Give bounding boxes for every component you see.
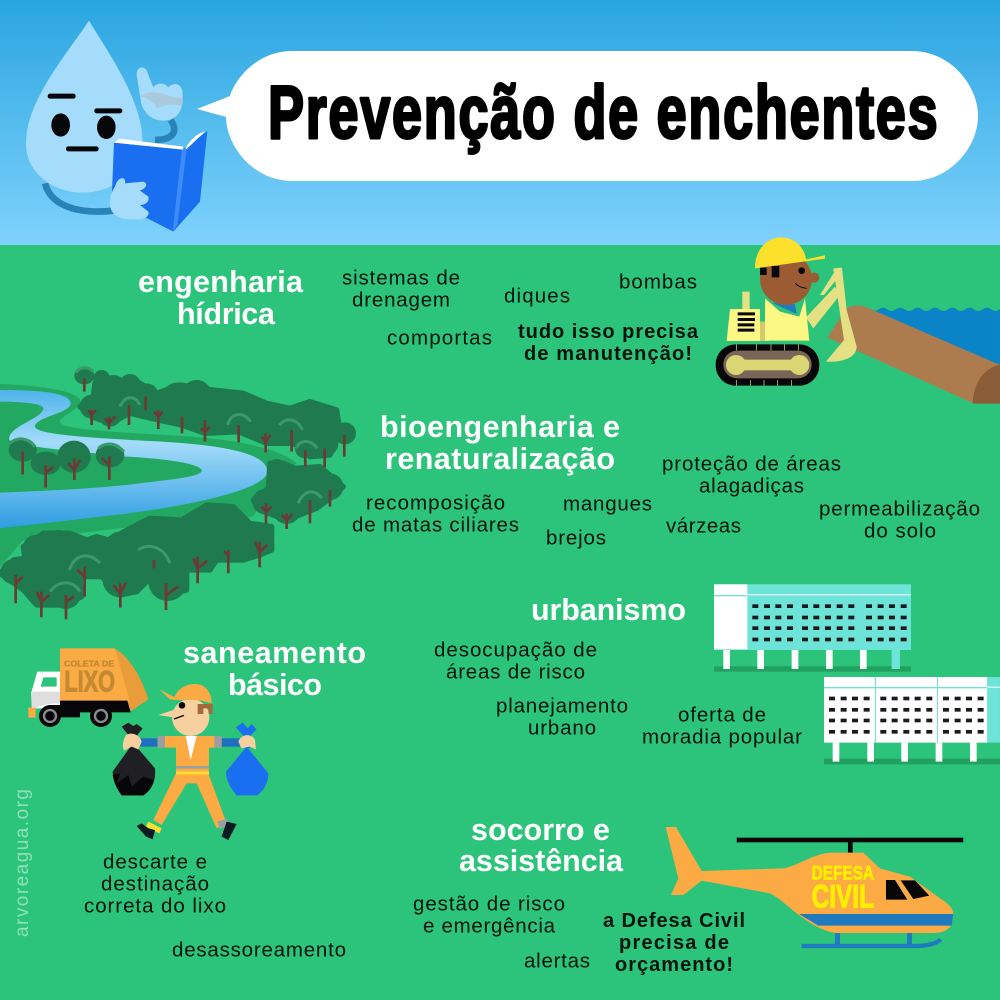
text block: recomposição de matas ciliares: de matas ciliares [352,514,519,536]
text block: descarte e destinação: destinação [101,872,209,896]
callout: Defesa Civil: precisa de [619,932,729,954]
text block: proteção de áreas alagadiças: alagadiças [699,474,804,498]
heading: bioengenharia e renaturalização: bioengenharia e [380,410,620,444]
tree crowns [1,368,356,609]
text block: descarte e destinação [84,850,226,918]
text block: gestão de risco: e emergência [423,914,556,938]
text: comportas: comportas [387,326,492,350]
river [0,390,267,528]
text block: proteção de áreas alagadiças [662,452,841,498]
text block: descarte e destinação: descarte e [103,850,207,874]
green ground background [0,245,1000,1000]
text block: sistemas de drenagem: sistemas de [342,266,460,290]
canopy highlights [10,368,322,592]
heading: saneamento básico [183,636,366,702]
tree trunks [16,378,344,619]
illustration: Defesa Civil helicopter: CIVIL [812,878,874,914]
text: mangues: mangues [563,492,652,516]
heading: bioengenharia e renaturalização: renaturalização [385,442,615,476]
text block: recomposição de matas ciliares: recomposição [366,492,505,514]
text block: proteção de áreas alagadiças: proteção de áreas [662,452,841,476]
illustration: garbage truck [28,648,148,727]
text block: recomposição de matas ciliares [352,492,519,536]
text block: oferta de moradia popular: oferta de [678,704,766,726]
text block: permeabilização do solo [819,498,980,542]
text block: gestão de risco: gestão de risco [413,892,565,916]
text block: oferta de moradia popular [642,704,802,748]
illustration: apartment block 1 [714,584,911,672]
text block: descarte e destinação: correta do lixo [84,894,226,918]
callout: Defesa Civil: orçamento! [615,954,733,976]
tree canopies [0,383,343,605]
callout: manutenção: de manutenção! [524,343,692,365]
illustration: Defesa Civil helicopter [666,827,963,946]
illustration: apartment block 2 [824,677,1000,764]
speech bubble [226,51,978,181]
heading: engenharia hídrica [138,265,304,331]
title: Prevenção de enchentes [268,70,938,154]
text: bombas: bombas [619,270,697,294]
heading: urbanismo: urbanismo [531,593,686,627]
text: alertas: alertas [524,950,590,972]
heading: socorro e assistência: assistência [459,844,624,878]
illustration: sanitation worker with trash bags [113,684,268,840]
heading: engenharia hídrica: hídrica [177,297,276,331]
illustration: Defesa Civil helicopter: DEFESA [812,864,874,885]
text block: oferta de moradia popular: moradia popular [642,726,802,748]
heading: bioengenharia e renaturalização [380,410,620,476]
source: arvoreagua.org: arvoreagua.org [12,789,33,937]
heading: socorro e assistência: socorro e [471,813,610,847]
callout: Defesa Civil: a Defesa Civil [603,910,745,932]
text: brejos: brejos [546,526,606,550]
text block: permeabilização do solo: permeabilização [819,498,980,520]
text block: planejamento urbano: planejamento [496,694,628,718]
text block: desocupação de áreas de risco [434,638,597,684]
text block: planejamento urbano [496,694,628,740]
text block: planejamento urbano: urbano [528,716,596,740]
illustration: garbage truck: LIXO [64,666,115,699]
sky background [0,0,1000,245]
heading: engenharia hídrica: engenharia [138,265,304,299]
callout: manutenção [518,321,699,365]
heading: saneamento básico: saneamento [183,636,366,670]
text block: sistemas de drenagem [342,266,460,312]
heading: saneamento básico: básico [228,668,322,702]
callout: manutenção: tudo isso precisa [518,321,699,343]
text block: sistemas de drenagem: drenagem [352,288,450,312]
text: várzeas: várzeas [666,514,741,538]
river bank [0,384,297,567]
text block: permeabilização do solo: do solo [864,520,936,542]
heading: socorro e assistência [459,813,624,878]
text block: gestão de risco [413,892,565,938]
text: desassoreamento: desassoreamento [172,938,346,962]
illustration: river and riparian forest [0,368,356,619]
text block: desocupação de áreas de risco: desocupação de [434,638,597,662]
callout: Defesa Civil [603,910,745,976]
text: diques: diques [504,284,570,308]
water drop mascot reading a book [26,21,207,232]
text block: desocupação de áreas de risco: áreas de risco [446,660,585,684]
illustration: excavator and dike [716,237,1000,404]
illustration: garbage truck: COLETA DE [64,659,115,668]
speech bubble tail [197,96,230,118]
